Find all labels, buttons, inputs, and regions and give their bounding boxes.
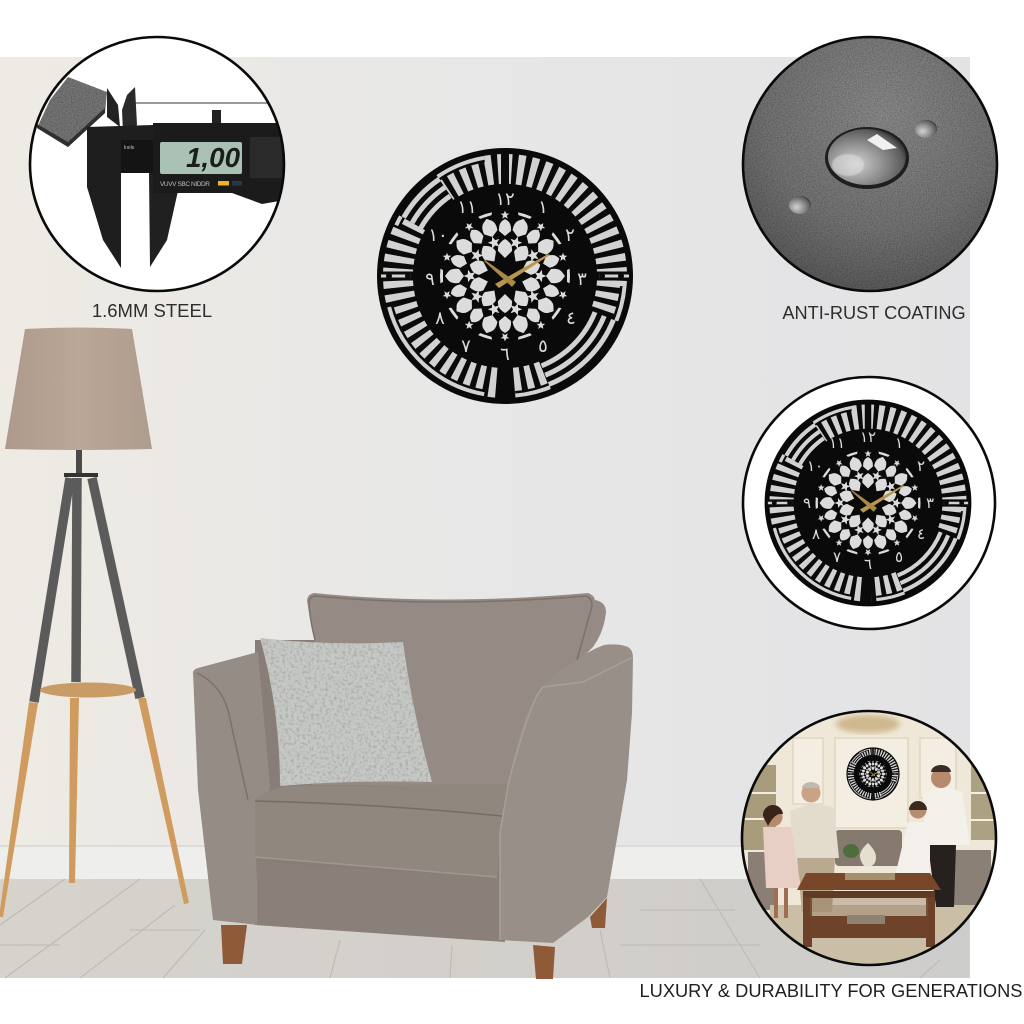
clock numerals: ٧: [461, 336, 471, 357]
small droplets: [789, 120, 937, 214]
inset numerals: ١٢: [860, 428, 876, 446]
inset numerals: ٩: [803, 494, 811, 512]
inset numerals: ٦: [864, 555, 872, 573]
steel sheet sample: [37, 77, 107, 147]
mini clock: [846, 747, 900, 801]
clock numerals: ٢: [565, 225, 575, 246]
left arm: [193, 652, 270, 925]
inset numerals: [803, 428, 934, 573]
chair legs: [221, 898, 607, 979]
coating grain: [744, 38, 996, 290]
seat cushion: [255, 784, 507, 878]
clock numerals: ٥: [538, 336, 548, 357]
caliper photo: [37, 77, 285, 268]
wooden legs: [0, 698, 189, 917]
lamp stem: [76, 450, 82, 474]
chair base: [257, 862, 500, 941]
inset numerals: ١: [895, 434, 903, 452]
caliper photo: VUVV SBC NIDDR: [160, 181, 210, 188]
clock numerals: ٨: [435, 308, 445, 329]
inset numerals: ٤: [917, 525, 925, 543]
girl left: [763, 805, 801, 918]
living room wall: [744, 712, 995, 916]
inset numerals: ١١: [829, 434, 845, 452]
inset numerals: ٢: [917, 457, 925, 475]
clock numerals: [425, 189, 587, 365]
grandfather: [790, 782, 839, 912]
clock numerals: ٣: [577, 269, 587, 290]
inset numerals: ٨: [812, 525, 820, 543]
caliper photo: 1,00: [186, 142, 240, 173]
inset numerals: ٧: [833, 548, 841, 566]
floor lamp: [0, 328, 189, 917]
tripod legs: [34, 478, 140, 702]
panel: caliper steel thickness: [30, 37, 285, 291]
panel: clock detail: [743, 377, 995, 629]
inset clock: [765, 400, 971, 606]
panel: family lifestyle photo: [740, 710, 1001, 970]
clock numerals: ١٢: [495, 189, 515, 210]
label: anti-rust coating: ANTI-RUST COATING: [782, 303, 966, 323]
label: luxury and durability: LUXURY & DURABILITY FOR GENERATIONS: [639, 980, 1022, 1001]
clock numerals: ٦: [500, 344, 510, 365]
shelves: [742, 765, 1001, 850]
girl right: [895, 801, 930, 876]
rug: [770, 905, 980, 965]
chandelier: [836, 715, 900, 733]
clock numerals: ١١: [457, 197, 477, 218]
inset numerals: ١٠: [807, 457, 823, 475]
sofa: [748, 830, 991, 910]
caliper photo: lıııılıı: [124, 145, 135, 151]
clock numerals: ٩: [425, 269, 435, 290]
lamp shade: [5, 328, 152, 450]
father: [923, 765, 970, 907]
clock numerals: ٤: [566, 308, 576, 329]
chair back: [307, 593, 606, 785]
large water droplet: [825, 127, 909, 189]
main wall clock: [377, 148, 633, 404]
lamp shelf: [40, 682, 136, 698]
right arm: [500, 644, 633, 943]
inset numerals: ٥: [895, 548, 903, 566]
LCD display: [160, 142, 242, 174]
inset numerals: ٣: [926, 494, 934, 512]
cushion pillow: [260, 638, 432, 786]
armchair: [193, 593, 633, 979]
label: 1.6mm steel: 1.6MM STEEL: [92, 300, 212, 321]
clock numerals: ١: [538, 197, 548, 218]
clock numerals: ١٠: [428, 225, 448, 246]
coffee table: [797, 843, 941, 947]
chair underlay: [255, 640, 510, 942]
panel: anti-rust coating: [743, 37, 997, 291]
